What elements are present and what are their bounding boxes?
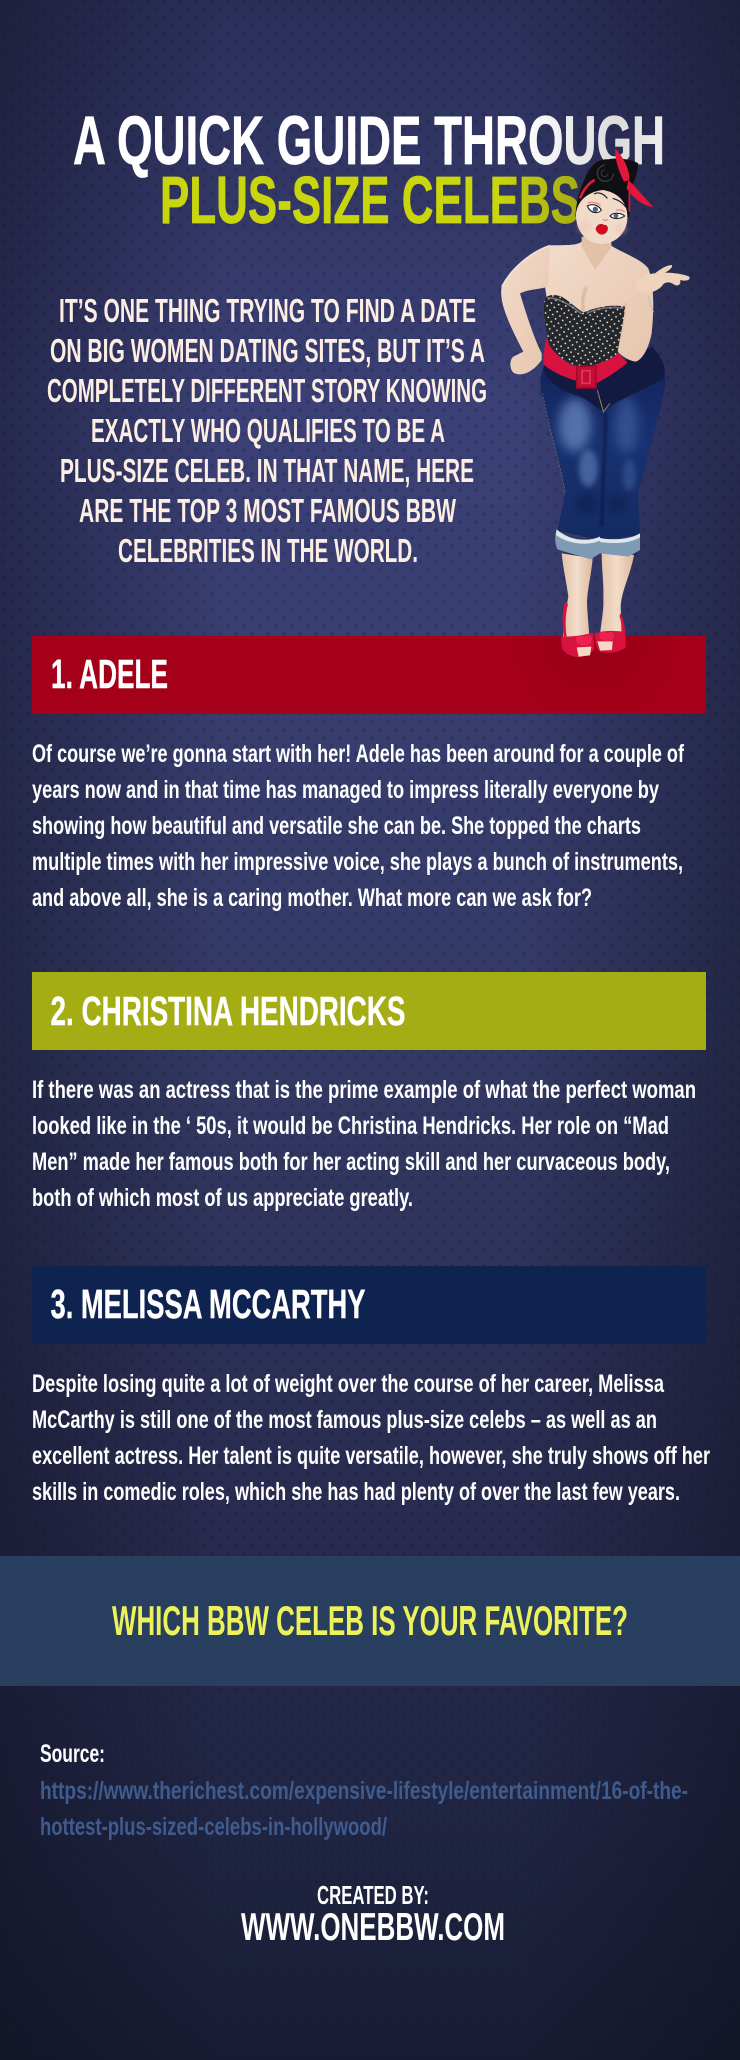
- source: [40, 1740, 688, 1841]
- intro text: ARE THE TOP 3 MOST FAMOUS BBW: [79, 492, 457, 529]
- hand: [636, 265, 690, 313]
- panel: Melissa McCarthy heading: [32, 1266, 706, 1344]
- bandana: [580, 148, 653, 212]
- jeans: [540, 347, 665, 540]
- panel: Christina Hendricks heading: [32, 972, 706, 1050]
- intro text: COMPLETELY DIFFERENT STORY KNOWING: [47, 372, 487, 409]
- credit: WWW.ONEBBW.COM: [241, 1906, 505, 1949]
- text block: Christina Hendricks: both of which most of us appreciate greatly.: [32, 1184, 413, 1212]
- callout band: [0, 1556, 740, 1686]
- right arm and torso: [545, 237, 653, 362]
- intro text: ON BIG WOMEN DATING SITES, BUT IT’S A: [50, 332, 485, 369]
- lower body: [540, 347, 665, 657]
- intro text: IT’S ONE THING TRYING TO FIND A DATE: [59, 292, 476, 329]
- source: Source:: [40, 1740, 105, 1768]
- face: [576, 190, 627, 244]
- legs: [562, 553, 634, 638]
- text block: Adele: [32, 740, 684, 912]
- illustration: pin-up figure: [501, 148, 690, 657]
- text block: Melissa McCarthy: [32, 1370, 710, 1506]
- intro text: [47, 292, 487, 569]
- credit: [241, 1880, 505, 1949]
- intro text: CELEBRITIES IN THE WORLD.: [118, 532, 418, 569]
- polka dot bustier: [544, 295, 625, 366]
- title: [73, 102, 665, 238]
- text block: Christina Hendricks: [32, 1076, 696, 1212]
- upper body: [501, 148, 690, 388]
- panel: Christina Hendricks heading: 2. CHRISTINA HENDRICKS: [50, 988, 406, 1034]
- source: hottest-plus-sized-celebs-in-hollywood/: [40, 1813, 387, 1841]
- credit: CREATED BY:: [317, 1880, 429, 1910]
- red shoes: [561, 602, 626, 657]
- hair: [575, 159, 638, 217]
- intro text: EXACTLY WHO QUALIFIES TO BE A: [91, 412, 445, 449]
- belt: [543, 337, 627, 388]
- intro text: PLUS-SIZE CELEB. IN THAT NAME, HERE: [60, 452, 474, 489]
- panel: Adele heading: [32, 636, 706, 714]
- panel: Adele heading: 1. ADELE: [51, 651, 168, 697]
- panel: Melissa McCarthy heading: 3. MELISSA MCCARTHY: [50, 1281, 366, 1327]
- left arm: [501, 245, 550, 374]
- cuffs: [555, 529, 640, 559]
